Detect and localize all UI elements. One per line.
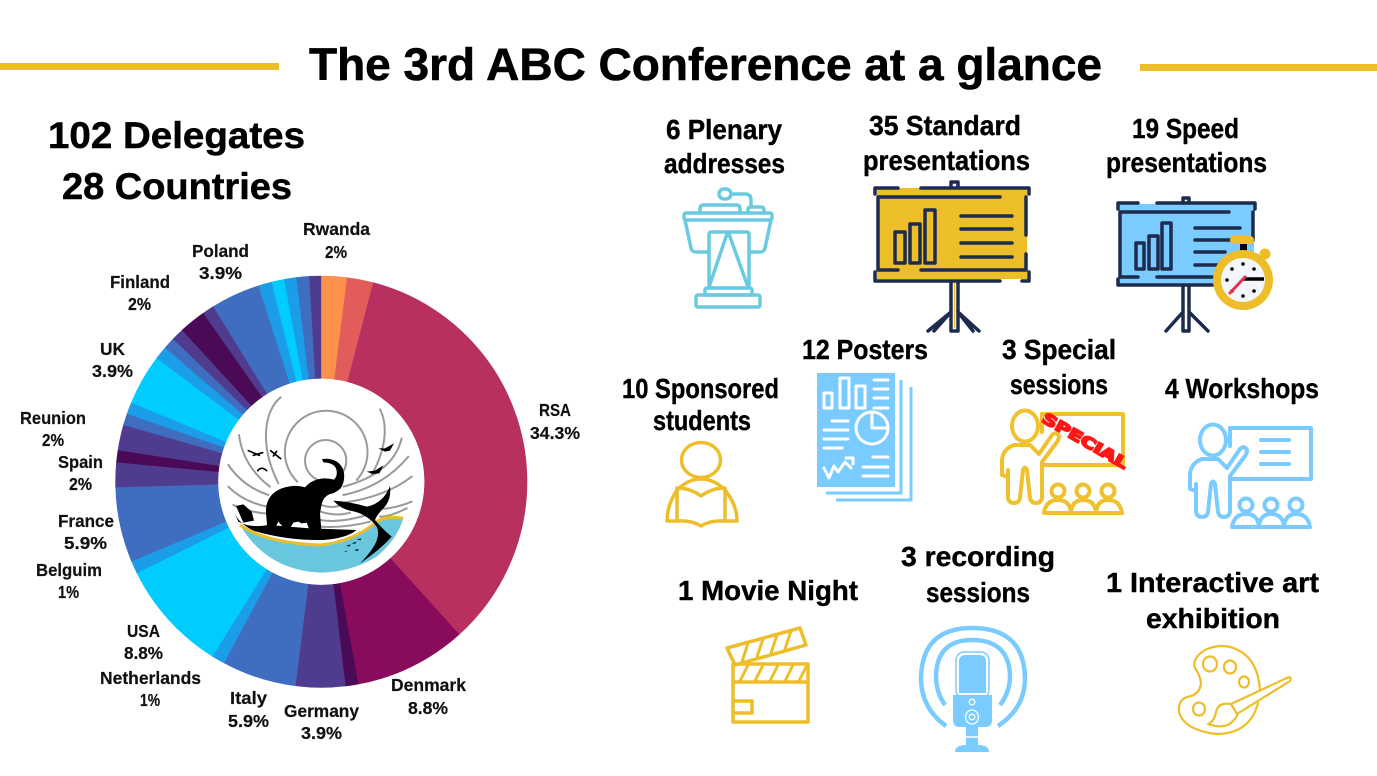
heading: recording: [901, 541, 1055, 608]
heading: special: sessions: [1010, 369, 1108, 400]
donut chart: delegates by country: [167, 327, 476, 636]
panel: movie night: [678, 575, 858, 722]
panel: special sessions: [1002, 334, 1132, 513]
country labels: USA: [127, 621, 160, 641]
country labels: RSA: [539, 400, 571, 420]
heading: exhibition: 1 Interactive art: [1106, 567, 1319, 598]
country labels: 1%: [58, 582, 79, 602]
heading: speed: 19 Speed: [1132, 113, 1239, 144]
conference logo: elephant and whale tail: [218, 379, 424, 585]
icon: presenter at board with audience: [1190, 424, 1311, 527]
heading: plenary: 6 Plenary: [666, 114, 782, 145]
country labels: Germany: [284, 701, 359, 721]
heading: exhibition: [1106, 567, 1319, 634]
icon: blue presentation board with stopwatch: [1118, 198, 1273, 331]
icon: microphone: [921, 628, 1025, 752]
heading: plenary: [664, 114, 785, 179]
country labels: 2%: [69, 474, 92, 494]
panel: recording sessions: [901, 541, 1055, 752]
heading: speed: [1106, 113, 1267, 178]
country labels: Italy: [230, 688, 267, 708]
heading: sponsored: students: [653, 405, 751, 436]
country labels: 8.8%: [408, 698, 448, 718]
country labels: 2%: [325, 242, 347, 262]
heading: posters: 12 Posters: [802, 334, 928, 365]
icon: stack of poster pages: [817, 373, 911, 500]
country labels: 2%: [42, 430, 64, 450]
heading: plenary: addresses: [664, 148, 785, 179]
special stamp: SPECIAL: [1039, 409, 1132, 473]
heading: sponsored: 10 Sponsored: [622, 373, 779, 404]
country labels: UK: [100, 339, 125, 359]
title: [0, 39, 1377, 90]
panel: workshops: [1165, 373, 1319, 527]
country labels: 3.9%: [199, 263, 242, 283]
heading: standard: presentations: [863, 145, 1030, 176]
country labels: Belguim: [36, 560, 102, 580]
country labels: [20, 219, 580, 743]
panel: posters: [802, 334, 928, 500]
heading: sponsored: [622, 373, 779, 436]
country labels: Denmark: [391, 675, 466, 695]
icon: student reading a book: [667, 442, 737, 526]
country labels: Spain: [58, 452, 103, 472]
country labels: 3.9%: [92, 361, 133, 381]
heading: special: 3 Special: [1002, 334, 1116, 365]
icon: painter palette and brush: [1179, 646, 1291, 734]
panel: interactive art exhibition: [1106, 567, 1319, 734]
heading: standard: [863, 110, 1030, 176]
heading: special: [1002, 334, 1116, 400]
title: The 3rd ABC Conference at a glance: [309, 39, 1102, 90]
country labels: Netherlands: [100, 668, 201, 688]
delegates and countries heading: 102 Delegates: [48, 115, 305, 156]
country labels: 2%: [128, 294, 151, 314]
heading: movie night: 1 Movie Night: [678, 575, 858, 606]
country labels: 5.9%: [228, 711, 269, 731]
heading: workshops: 4 Workshops: [1165, 373, 1319, 404]
heading: recording: 3 recording: [901, 541, 1055, 572]
country labels: Poland: [192, 241, 249, 261]
country labels: Reunion: [20, 408, 86, 428]
icon: podium: [684, 189, 772, 307]
country labels: 3.9%: [301, 723, 342, 743]
delegates and countries heading: 28 Countries: [62, 166, 292, 207]
delegates and countries heading: [48, 115, 305, 207]
country labels: 1%: [140, 690, 160, 710]
icon: film clapperboard: [727, 628, 808, 722]
heading: standard: 35 Standard: [869, 110, 1021, 141]
country labels: 5.9%: [64, 533, 107, 553]
country labels: Rwanda: [303, 219, 370, 239]
heading: recording: sessions: [926, 577, 1030, 608]
country labels: 34.3%: [530, 423, 580, 443]
icon: yellow presentation board: [875, 182, 1029, 331]
panel: speed presentations: [1106, 113, 1273, 331]
heading: speed: presentations: [1106, 147, 1267, 178]
heading: exhibition: exhibition: [1146, 603, 1280, 634]
icon: stopwatch: [1213, 236, 1273, 310]
panel: standard presentations: [863, 110, 1030, 331]
icon: presenter with board: [1002, 410, 1123, 513]
panel: sponsored students: [622, 373, 779, 526]
country labels: France: [58, 511, 114, 531]
country labels: 8.8%: [124, 643, 163, 663]
panel: plenary addresses: [664, 114, 785, 307]
country labels: Finland: [110, 272, 170, 292]
